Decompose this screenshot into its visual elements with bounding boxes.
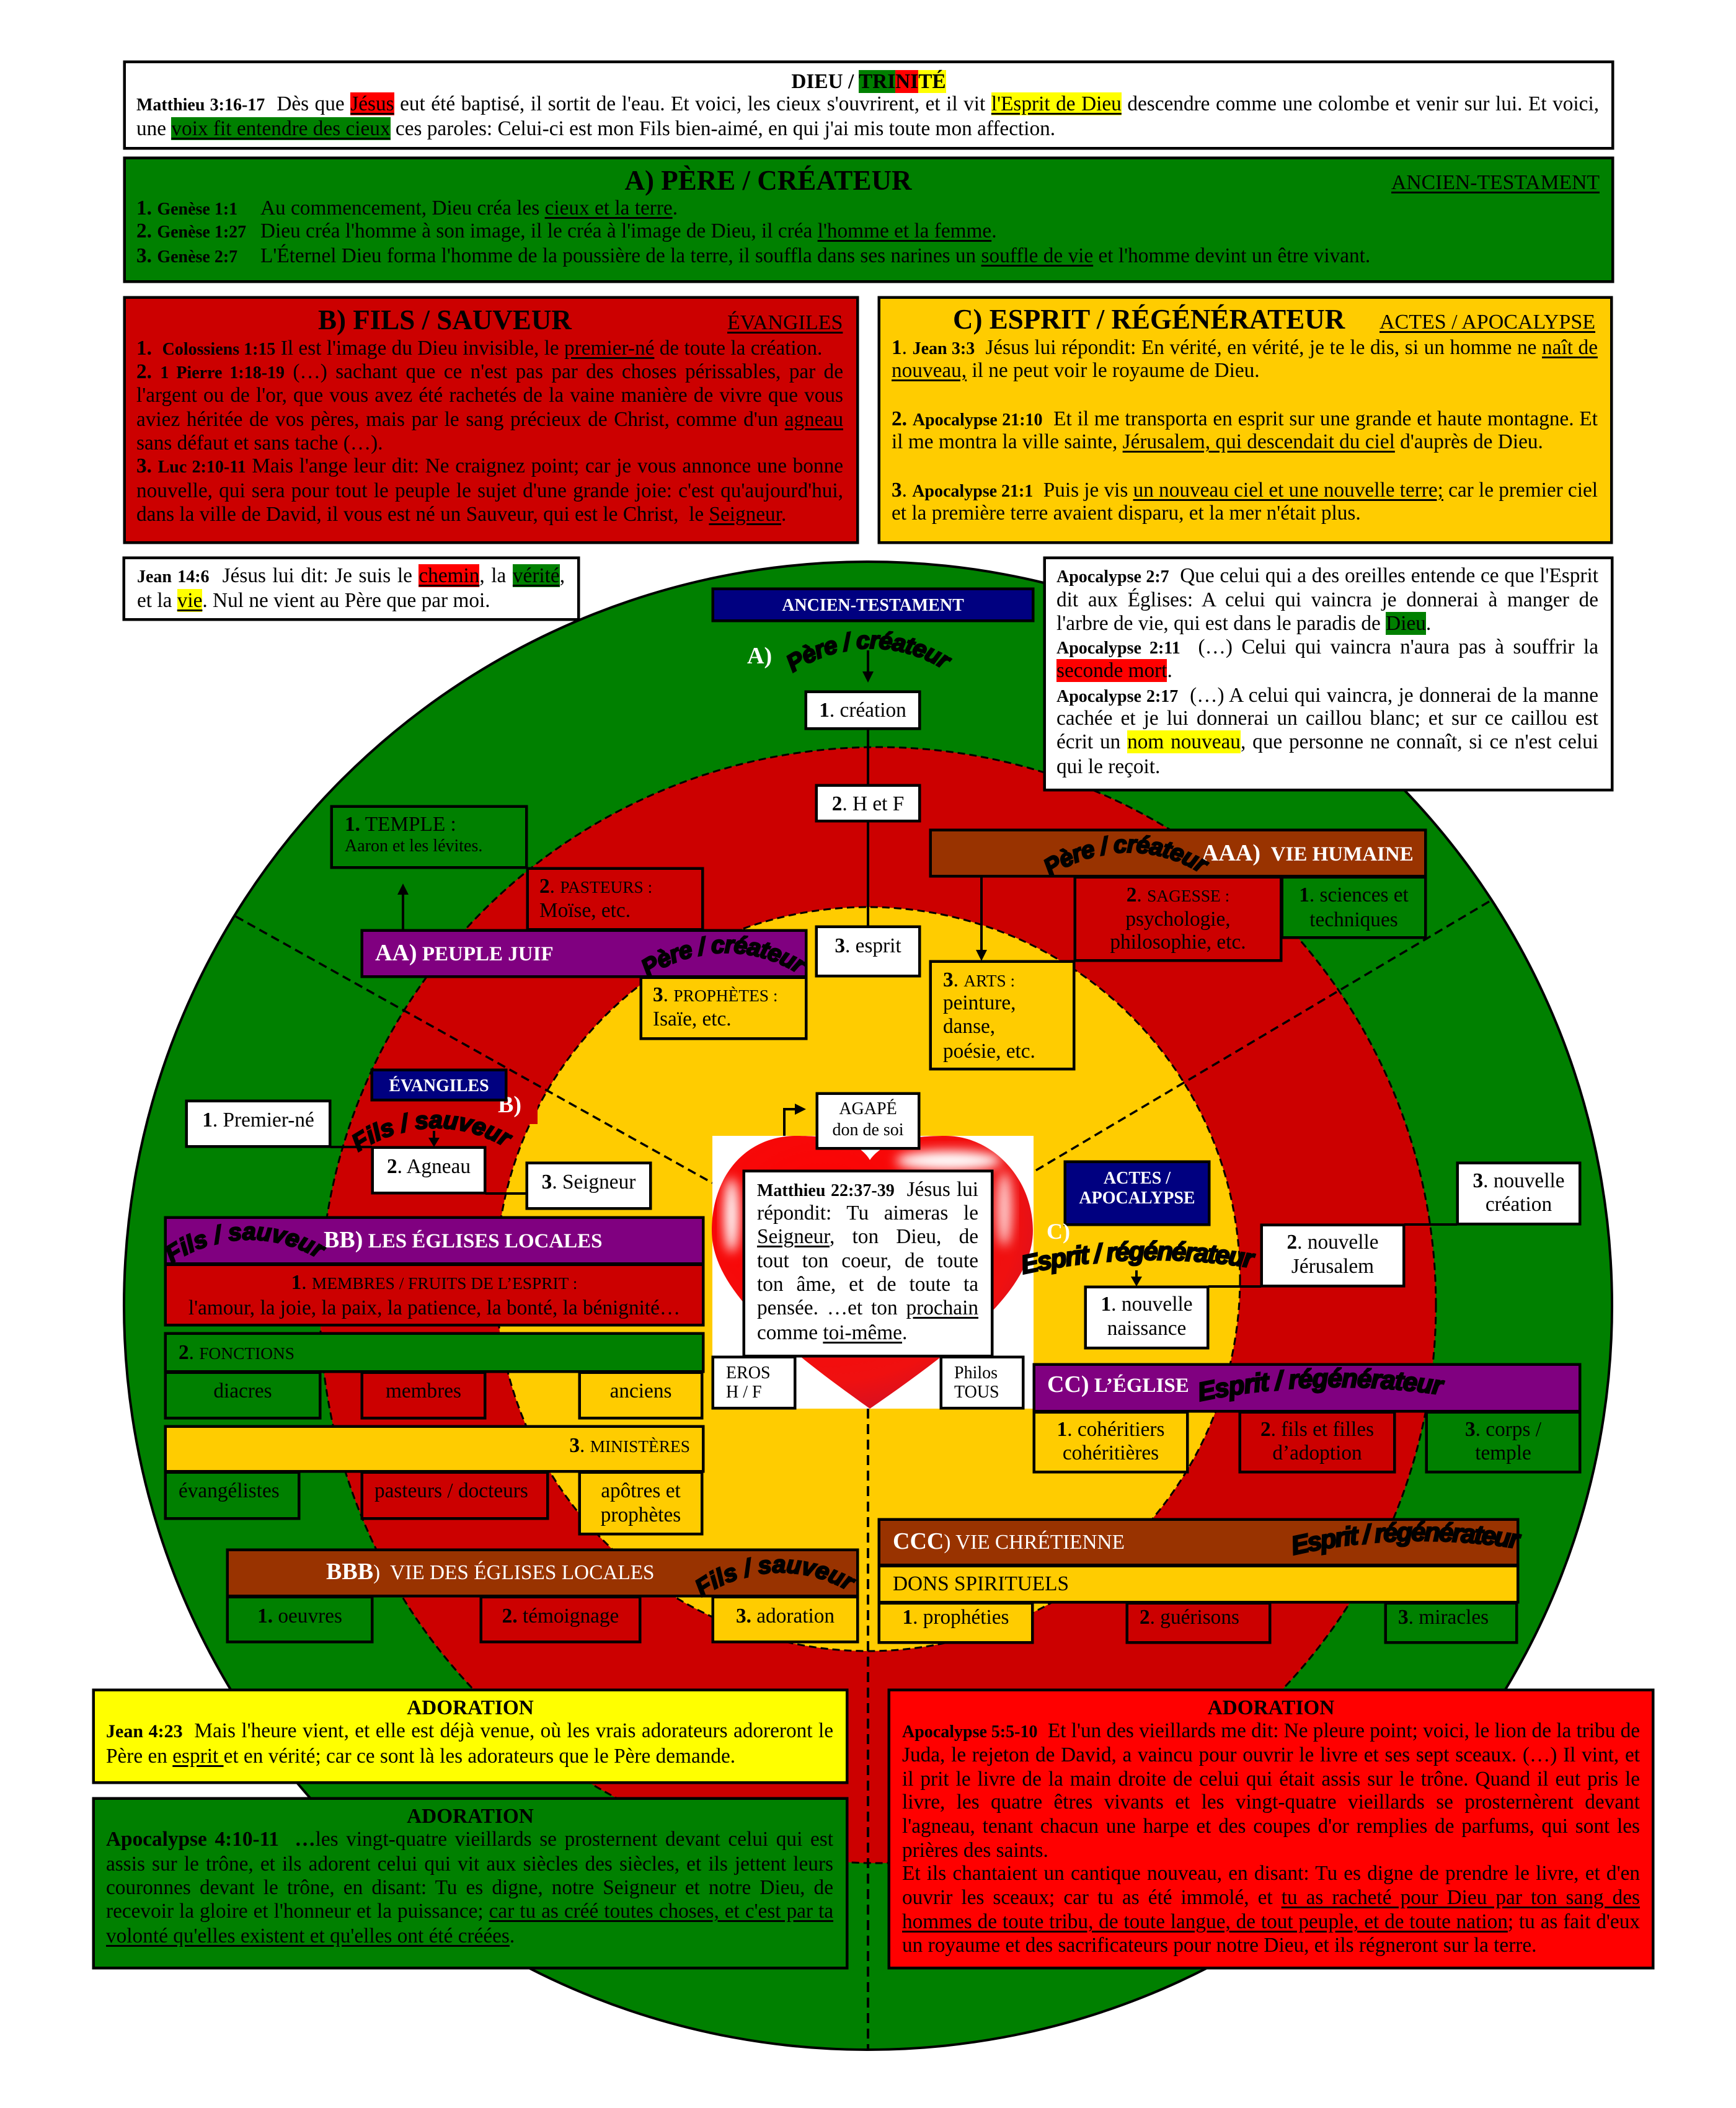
panel: A) Père / Créateur [124, 157, 1613, 282]
panel: Adoration Jean 4:23: Jean 4:23 Mais l'heure vient, et elle est déjà venue, où les vrais adorateurs adoreront le [106, 1719, 833, 1742]
word-art: Esprit / régénérateur (CC): Esprit / régénérateur [1199, 1367, 1446, 1402]
box: 2. Agneau: 2. Agneau [387, 1155, 471, 1178]
callout: Matthieu 22:37-39: tout ton coeur, de toute [757, 1249, 978, 1272]
header: CCC) Vie chrétienne [879, 1519, 1518, 1566]
panel: A) Père / Créateur: ANCIEN-TESTAMENT [1391, 171, 1600, 194]
header: BB) Les églises locales: BB) LES ÉGLISES LOCALES [324, 1227, 603, 1253]
box: membres: membres [386, 1380, 461, 1402]
panel: B) Fils / Sauveur: 3. Luc 2:10-11 Mais l'ange leur dit: Ne craignez point; car je vous annonce une bonne [136, 454, 843, 477]
box: 3. corps / temple: temple [1475, 1442, 1531, 1464]
panel: Adoration Jean 4:23 [93, 1690, 848, 1783]
box: pasteurs / docteurs: pasteurs / docteurs [374, 1479, 528, 1502]
word-art: Fils / sauveur (BB): Fils / sauveur [167, 1224, 327, 1262]
box: diacres: diacres [213, 1380, 272, 1402]
box: Agapé: AGAPÉ [839, 1099, 897, 1118]
box: 3. esprit [816, 926, 920, 976]
panel: Adoration Apocalypse 4:10-11: ADORATION [407, 1805, 534, 1828]
box: 2. nouvelle Jérusalem: 2. nouvelle [1287, 1231, 1378, 1254]
panel: C) Esprit / Régénérateur: nouveau, il ne peut voir le royaume de Dieu. [892, 359, 1260, 382]
box: 1. création [805, 691, 920, 729]
label: B): B) [498, 1092, 521, 1118]
header: 3. Ministères: 3. MINISTÈRES [569, 1434, 690, 1457]
box: Agapé [817, 1093, 919, 1149]
box: 3. Seigneur [526, 1162, 651, 1209]
box: 3. Prophètes: Isaïe, etc. [653, 1008, 732, 1030]
box: 1. Premier-né [186, 1100, 330, 1147]
box: 3. Prophètes [640, 977, 807, 1039]
box: 3. esprit: 3. esprit [835, 934, 901, 957]
box: 3. adoration: 3. adoration [736, 1605, 835, 1628]
concentric circle diagram background [123, 560, 1613, 2051]
box: 1. Membres / fruits de l'Esprit: l'amour, la joie, la paix, la patience, la bonté, la bénignité… [188, 1296, 680, 1319]
word-art: Esprit / régénérateur (C): Esprit / régénérateur [1022, 1240, 1256, 1275]
box: 3. nouvelle création [1457, 1162, 1580, 1224]
panel: Adoration Apocalypse 5:5-10: ouvrir les sceaux; car tu as été immolé, et tu as racheté pour Dieu par ton sang des [902, 1886, 1640, 1909]
header: 2. Fonctions: 2. FONCTIONS [179, 1341, 294, 1364]
panel: B) Fils / Sauveur: B) FILS / SAUVEUR [318, 304, 572, 335]
label: Évangiles: ÉVANGILES [389, 1076, 489, 1096]
box: 3. corps / temple [1426, 1412, 1580, 1472]
box: Eros: H / F [726, 1383, 762, 1402]
header: Dons spirituels: DONS SPIRITUELS [893, 1572, 1069, 1595]
header: BB) Les églises locales [165, 1217, 704, 1264]
box: 2. guérisons: 2. guérisons [1140, 1606, 1239, 1629]
header: BBB) Vie des églises locales: BBB) VIE DES ÉGLISES LOCALES [326, 1559, 655, 1585]
box: 2. nouvelle Jérusalem: Jérusalem [1291, 1255, 1374, 1278]
header: Dons spirituels [879, 1566, 1518, 1603]
box: 1. cohéritiers: cohéritières [1063, 1442, 1159, 1464]
box: 2. Sagesse: psychologie, [1125, 908, 1231, 931]
word-art: Fils / sauveur (B): Fils / sauveur [352, 1112, 513, 1153]
box: 3. corps / temple: 3. corps / [1465, 1418, 1541, 1441]
panel: Adoration Apocalypse 4:10-11 [93, 1798, 848, 1968]
callout: Apocalypse 2: qui le reçoit. [1056, 755, 1160, 778]
label: Actes / Apocalypse: APOCALYPSE [1079, 1189, 1195, 1208]
panel: Adoration Apocalypse 5:5-10: ADORATION [1208, 1696, 1334, 1719]
box: 2. fils et filles: d’adoption [1272, 1442, 1362, 1464]
box: 1. nouvelle naissance [1085, 1286, 1208, 1348]
box: 2. guérisons [1127, 1603, 1270, 1643]
panel: A) Père / Créateur: 2. Genèse 1:27 [136, 219, 246, 242]
word-art: Père / créateur (AA): Père / créateur [641, 935, 805, 975]
header: 2. Fonctions [165, 1333, 704, 1372]
word-art: Père / créateur (A): Père / créateur [786, 631, 952, 673]
callout: Matthieu 22:37-39: répondit: Tu aimeras le [757, 1202, 978, 1224]
box: 2. Pasteurs: Moïse, etc. [539, 899, 631, 922]
panel: B) Fils / Sauveur: ÉVANGILES [727, 311, 843, 334]
box: 1. nouvelle naissance: 1. nouvelle [1101, 1293, 1192, 1316]
panel: Adoration Apocalypse 5:5-10: prières des saints. [902, 1839, 1048, 1862]
callout: Apocalypse 2: Apocalypse 2:7 Que celui qui a des oreilles entende ce que l'Esprit [1056, 564, 1598, 587]
box: 1. création: 1. création [819, 699, 906, 722]
box: 2. Sagesse: philosophie, etc. [1110, 931, 1246, 954]
callout: Apocalypse 2: écrit un nom nouveau, que personne ne connaît, si ce n'est celui [1056, 730, 1598, 753]
panel: Adoration Apocalypse 4:10-11: Apocalypse 4:10-11 …les vingt-quatre vieillards se prosternent devant celui qui est [106, 1828, 833, 1851]
box: 1. Temple: 1. TEMPLE : [345, 813, 456, 836]
header: BBB) Vie des églises locales [227, 1549, 858, 1596]
header: AA) Peuple juif [361, 930, 807, 977]
box: 2. H et F [816, 785, 920, 822]
callout: Matthieu 22:37-39 [743, 1171, 993, 1357]
callout: Apocalypse 2 [1044, 557, 1613, 790]
panel: B) Fils / Sauveur: 2. 1 Pierre 1:18-19 (…) sachant que ce n'est pas par des choses périssables, par de [136, 360, 843, 383]
panel: Adoration Apocalypse 4:10-11: recevoir la gloire et l'honneur et la puissance; car tu as créé toutes choses, et c'est par ta [106, 1900, 833, 1923]
box: 3. miracles [1385, 1603, 1517, 1643]
callout: Matthieu 22:37-39: Seigneur, ton Dieu, de [757, 1225, 978, 1248]
box: 2. H et F: 2. H et F [832, 792, 904, 815]
box: apôtres et prophètes [579, 1472, 702, 1534]
box: 2. Sagesse [1074, 877, 1282, 961]
box: 2. fils et filles [1239, 1412, 1395, 1472]
box: 1. prophéties [879, 1603, 1033, 1643]
box: 2. témoignage [480, 1596, 640, 1642]
box: 1. oeuvres: 1. oeuvres [257, 1605, 342, 1628]
box: 3. Arts: danse, [943, 1015, 995, 1038]
panel: B) Fils / Sauveur: dans la ville de David, il vous est né un Sauveur, qui est le Christ, le Seigneur. [136, 503, 786, 526]
panel: B) Fils / Sauveur: 1. Colossiens 1:15 Il est l'image du Dieu invisible, le premier-né de toute la création. [136, 337, 822, 360]
callout: Jean 14:6: Jean 14:6 Jésus lui dit: Je suis le chemin, la vérité, [137, 564, 565, 587]
box: pasteurs / docteurs [361, 1472, 548, 1519]
box: 2. nouvelle Jérusalem [1261, 1224, 1404, 1286]
panel: C) Esprit / Régénérateur: 3. Apocalypse 21:1 Puis je vis un nouveau ciel et une nouvelle terre; car le premier ciel [892, 479, 1598, 502]
header: CC) L'Église: CC) L’ÉGLISE [1047, 1371, 1189, 1397]
box: évangélistes: évangélistes [179, 1479, 280, 1502]
header: AAA) Vie humaine: AAA) VIE HUMAINE [1202, 840, 1414, 866]
box: 1. Premier-né: 1. Premier-né [202, 1109, 314, 1132]
panel: Dieu / Trinité: Matthieu 3:16-17 Dès que Jésus eut été baptisé, il sortit de l'eau. Et voici, les cieux s'ouvrirent, et il vit l'Esprit de Dieu descendre comme une colombe et venir sur lui. Et voici, [136, 92, 1599, 115]
label: Ancien-Testament [712, 588, 1034, 621]
box: apôtres et prophètes: prophètes [601, 1504, 681, 1526]
label: Ancien-Testament: ANCIEN-TESTAMENT [782, 596, 964, 615]
panel: Adoration Jean 4:23: Père en esprit et en vérité; car ce sont là les adorateurs que le Père demande. [106, 1745, 735, 1768]
panel: C) Esprit / Régénérateur: et la première terre avaient disparu, et la mer n'était plus. [892, 502, 1361, 525]
panel: C) Esprit / Régénérateur: C) ESPRIT / RÉGÉNÉRATEUR [953, 304, 1345, 335]
panel: A) Père / Créateur: 1. Genèse 1:1 [136, 197, 237, 219]
box: 2. Sagesse: 2. SAGESSE : [1127, 884, 1229, 906]
box: Philos: Philos [954, 1363, 998, 1383]
box: anciens: anciens [610, 1380, 671, 1402]
box: 3. Arts: 3. ARTS : [943, 968, 1015, 991]
box: 2. Pasteurs: 2. PASTEURS : [539, 875, 652, 898]
panel: Adoration Apocalypse 4:10-11: assis sur le trône, et ils adorent celui qui vit aux siècles des siècles, et ils jettent leurs [106, 1853, 833, 1876]
box: 3. adoration [712, 1596, 858, 1642]
box: 1. sciences et techniques: 1. sciences et [1299, 884, 1409, 906]
box: 2. Pasteurs [527, 868, 703, 930]
box: anciens [579, 1372, 702, 1419]
panel: C) Esprit / Régénérateur [879, 297, 1612, 543]
box: 1. Membres / fruits de l'Esprit [165, 1264, 704, 1326]
panel: B) Fils / Sauveur: nouvelle, qui sera pour tout le peuple le sujet d'une grande joie: c'est qu'aujourd'hui, [136, 479, 843, 502]
arrow: to arts [976, 877, 987, 961]
box: 1. oeuvres [227, 1596, 373, 1642]
box: 3. Arts: peinture, [943, 991, 1016, 1014]
header: AAA) Vie humaine [930, 830, 1426, 877]
header: AA) Peuple juif: AA) PEUPLE JUIF [375, 940, 554, 966]
box: Eros [712, 1357, 795, 1409]
panel: Adoration Apocalypse 5:5-10: Apocalypse 5:5-10 Et l'un des vieillards me dit: Ne pleure point; voici, le lion de la tribu de [902, 1719, 1640, 1742]
box: apôtres et prophètes: apôtres et [601, 1479, 681, 1502]
label: C): C) [1047, 1219, 1070, 1244]
box: 1. Temple [331, 806, 527, 868]
box: Agapé: don de soi [832, 1120, 904, 1140]
callout: Apocalypse 2: cachée et je lui donnerai un caillou blanc; et sur ce caillou est [1056, 707, 1598, 730]
panel: C) Esprit / Régénérateur: 1. Jean 3:3 Jésus lui répondit: En vérité, en vérité, je te le dis, si un homme ne naît de [892, 336, 1598, 359]
header: CCC) Vie chrétienne: CCC) VIE CHRÉTIENNE [893, 1528, 1125, 1554]
box: diacres [165, 1372, 321, 1419]
box: 2. témoignage: 2. témoignage [502, 1605, 619, 1628]
box: Philos [941, 1357, 1024, 1409]
label: Actes / Apocalypse [1065, 1161, 1210, 1225]
callout: Matthieu 22:37-39: ton âme, et de toute ta [757, 1273, 978, 1296]
callout: Jean 14:6: et la vie. Nul ne vient au Père que par moi. [137, 589, 490, 612]
callout: Apocalypse 2: Apocalypse 2:17 (…) A celui qui vaincra, je donnerai de la manne [1056, 684, 1598, 707]
panel: B) Fils / Sauveur: sans défaut et sans tache (…). [136, 432, 383, 454]
panel: Adoration Apocalypse 4:10-11: couronnes devant le trône, en disant: Tu es digne, notre Seigneur et notre Dieu, de [106, 1876, 833, 1899]
callout: Matthieu 22:37-39: pensée. …et ton prochain [757, 1296, 978, 1319]
box: 1. sciences et techniques [1282, 877, 1426, 938]
panel: C) Esprit / Régénérateur: ACTES / APOCALYPSE [1380, 311, 1595, 334]
panel: A) Père / Créateur: 3. Genèse 2:7 [136, 244, 237, 267]
arrow: to création [862, 650, 874, 683]
word-art: Esprit / régénérateur (CCC): Esprit / régénérateur [1292, 1521, 1523, 1556]
callout: Matthieu 22:37-39: Matthieu 22:37-39 Jésus lui [757, 1178, 978, 1201]
callout: Apocalypse 2: Apocalypse 2:11 (…) Celui qui vaincra n'aura pas à souffrir la [1056, 636, 1598, 658]
panel: C) Esprit / Régénérateur: il me montra la ville sainte, Jérusalem, qui descendait du ciel d'auprès de Dieu. [892, 430, 1543, 453]
arrow: to temple [397, 884, 409, 930]
panel: Adoration Apocalypse 5:5-10: hommes de toute tribu, de toute langue, de tout peuple, et de toute nation; tu as fait d'eux [902, 1910, 1640, 1933]
label: Actes / Apocalypse: ACTES / [1104, 1169, 1171, 1188]
box: 3. Seigneur: 3. Seigneur [542, 1171, 636, 1194]
panel: B) Fils / Sauveur: l'argent ou de l'or, que vous avez été rachetés de la vaine manière de vivre que vous [136, 384, 843, 407]
callout: Apocalypse 2: l'arbre de vie, qui est dans le paradis de Dieu. [1056, 612, 1431, 635]
box: 3. miracles: 3. miracles [1398, 1606, 1489, 1629]
box: 1. nouvelle naissance: naissance [1107, 1317, 1186, 1340]
label: Évangiles [371, 1070, 507, 1100]
panel: B) Fils / Sauveur [124, 297, 858, 543]
box: 3. nouvelle création: création [1486, 1193, 1552, 1216]
box: 1. prophéties: 1. prophéties [902, 1606, 1009, 1629]
arrow: to agneau [428, 1131, 440, 1147]
panel: A) Père / Créateur: L'Éternel Dieu forma l'homme de la poussière de la terre, il souffla dans ses narines un souffle de vie et l'homme devint un être vivant. [260, 244, 1370, 267]
panel: A) Père / Créateur: Dieu créa l'homme à son image, il le créa à l'image de Dieu, il créa l'homme et la femme. [260, 219, 997, 242]
box: 1. sciences et techniques: techniques [1309, 908, 1398, 931]
box: 1. cohéritiers [1034, 1412, 1188, 1472]
box: 1. Membres / fruits de l'Esprit: 1. MEMBRES / FRUITS DE L’ESPRIT : [291, 1271, 577, 1294]
box: 3. Arts: poésie, etc. [943, 1040, 1035, 1063]
callout: Matthieu 22:37-39: comme toi-même. [757, 1321, 907, 1344]
header: 3. Ministères [165, 1426, 704, 1472]
panel: Dieu / Trinité [124, 61, 1613, 149]
box: 3. Prophètes: 3. PROPHÈTES : [653, 983, 777, 1006]
header: CC) L'Église [1034, 1364, 1580, 1412]
panel: Adoration Apocalypse 5:5-10: l'agneau, tenant chacun une harpe et des coupes d'or remplies de parfums, qui sont les [902, 1815, 1640, 1838]
panel: Adoration Apocalypse 5:5-10: Et ils chantaient un cantique nouveau, en disant: Tu es digne de prendre le livre, et d'en [902, 1862, 1640, 1885]
box: Eros: EROS [726, 1363, 771, 1383]
arrow: to agapé [784, 1104, 806, 1136]
panel: Adoration Apocalypse 5:5-10 [888, 1690, 1654, 1968]
box: évangélistes [165, 1472, 299, 1519]
box: 2. fils et filles: 2. fils et filles [1260, 1418, 1374, 1441]
label: A): A) [747, 643, 772, 669]
panel: Adoration Apocalypse 5:5-10: il prit le livre de la main droite de celui qui était assis sur le trône. Quand il eut pris le [902, 1768, 1640, 1791]
panel: Adoration Apocalypse 4:10-11: volonté qu'elles existent et qu'elles ont été créées. [106, 1924, 515, 1947]
arrow: to naissance [1131, 1270, 1142, 1286]
callout: Jean 14:6 [123, 557, 579, 620]
box: 1. Temple: Aaron et les lévites. [345, 836, 482, 856]
panel: Adoration Apocalypse 5:5-10: livre, les quatre êtres vivants et les vingt-quatre vieillards se prosternèrent devant [902, 1791, 1640, 1814]
box: Philos: TOUS [954, 1383, 999, 1402]
panel: Adoration Apocalypse 5:5-10: Juda, le rejeton de David, a vaincu pour ouvrir le livre et ses sept sceaux. (…) Il vint, et [902, 1743, 1640, 1766]
box: 2. Agneau [372, 1147, 485, 1194]
panel: Adoration Jean 4:23: ADORATION [407, 1696, 534, 1719]
panel: Dieu / Trinité: une voix fit entendre des cieux ces paroles: Celui-ci est mon Fils bien-aimé, en qui j'ai mis toute mon affection. [136, 117, 1055, 140]
callout: Apocalypse 2: dit aux Églises: A celui qui vaincra je donnerai à manger de [1056, 588, 1598, 611]
word-art: Père / créateur (AAA): Père / créateur [1043, 835, 1210, 875]
panel: A) Père / Créateur: A) PÈRE / CRÉATEUR [625, 165, 911, 196]
box: 3. nouvelle création: 3. nouvelle [1473, 1169, 1564, 1192]
panel: Dieu / Trinité: DIEU / TRINITÉ [791, 70, 946, 93]
box: 1. cohéritiers: 1. cohéritiers [1057, 1418, 1164, 1441]
box: 3. Arts [930, 961, 1074, 1070]
panel: Adoration Apocalypse 5:5-10: un royaume et des sacrificateurs pour notre Dieu, et ils régneront sur la terre. [902, 1934, 1536, 1957]
callout: Apocalypse 2: seconde mort. [1056, 659, 1172, 682]
panel: A) Père / Créateur: Au commencement, Dieu créa les cieux et la terre. [260, 197, 678, 219]
word-art: Fils / sauveur (BBB): Fils / sauveur [695, 1557, 856, 1598]
panel: B) Fils / Sauveur: aviez héritée de vos pères, mais par le sang précieux de Christ, comme d'un agneau [136, 408, 843, 431]
box: membres [361, 1372, 485, 1419]
panel: C) Esprit / Régénérateur: 2. Apocalypse 21:10 Et il me transporta en esprit sur une grande et haute montagne. Et [892, 407, 1598, 430]
